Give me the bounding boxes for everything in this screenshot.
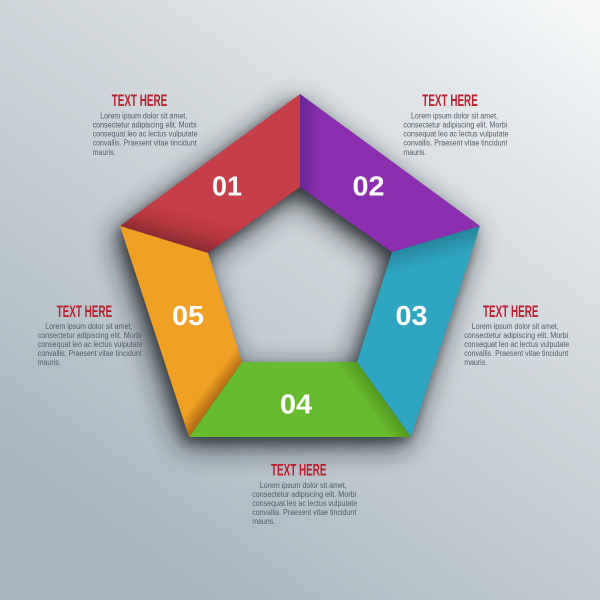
body 01: mauris. (93, 148, 116, 157)
segment 03: blue (357, 226, 480, 437)
segment 04: green (189, 362, 411, 437)
body 05: Lorem ipsum dolor sit amet, (45, 322, 132, 331)
body 05: convallis. Praesent vitae tincidunt (38, 349, 142, 358)
body 02: mauris. (403, 148, 426, 157)
text block 01 (93, 92, 198, 157)
body 03: Lorem ipsum dolor sit amet, (472, 322, 559, 331)
body 02: consectetur adipiscing elit. Morbi (403, 121, 508, 130)
body 01: consectetur adipiscing elit. Morbi (93, 121, 197, 130)
body 01: convallis. Praesent vitae tincidunt (93, 139, 197, 148)
body 02: convallis. Praesent vitae tincidunt (403, 139, 508, 148)
body 05: mauris. (38, 358, 61, 367)
segment 01: red (120, 94, 300, 253)
heading 02: TEXT HERE (422, 92, 478, 110)
body 05 (38, 322, 143, 367)
body 03: convallis. Praesent vitae tincidunt (464, 349, 569, 358)
text block 04 (252, 461, 358, 526)
body 03: consectetur adipiscing elit. Morbi (464, 331, 568, 340)
body 05: consectetur adipiscing elit. Morbi (38, 331, 142, 340)
body 04 (252, 481, 358, 526)
body 04: consectetur adipiscing elit. Morbi (252, 490, 356, 499)
body 03 (464, 322, 570, 367)
body 04: consequat leo ac lectus vulputate (252, 499, 358, 508)
ring shadow (114, 99, 477, 446)
body 02 (403, 112, 509, 157)
body 03: consequat leo ac lectus vulputate (464, 340, 570, 349)
body 02: Lorem ipsum dolor sit amet, (411, 112, 498, 121)
heading 04: TEXT HERE (271, 461, 326, 479)
number 03: 03 (396, 300, 428, 331)
text block 03 (464, 303, 570, 367)
number 05: 05 (172, 300, 204, 331)
body 04: mauris. (252, 517, 275, 526)
body 01: Lorem ipsum dolor sit amet, (100, 112, 187, 121)
body 01: consequat leo ac lectus vulputate (93, 130, 198, 139)
body 05: consequat leo ac lectus vulputate (38, 340, 143, 349)
body 01 (93, 112, 198, 157)
body 04: convallis. Praesent vitae tincidunt (252, 508, 357, 517)
body 02: consequat leo ac lectus vulputate (403, 130, 509, 139)
heading 05: TEXT HERE (57, 303, 112, 321)
body 04: Lorem ipsum dolor sit amet, (260, 481, 347, 490)
number 02: 02 (352, 170, 384, 202)
heading 03: TEXT HERE (483, 303, 538, 321)
number 01: 01 (212, 170, 242, 202)
number 04: 04 (280, 388, 313, 420)
text block 05 (38, 303, 143, 367)
text block 02 (403, 92, 509, 157)
heading 01: TEXT HERE (112, 92, 167, 110)
segment 02: purple (300, 94, 480, 252)
segment 05: orange (120, 226, 242, 437)
body 03: mauris. (464, 358, 487, 367)
